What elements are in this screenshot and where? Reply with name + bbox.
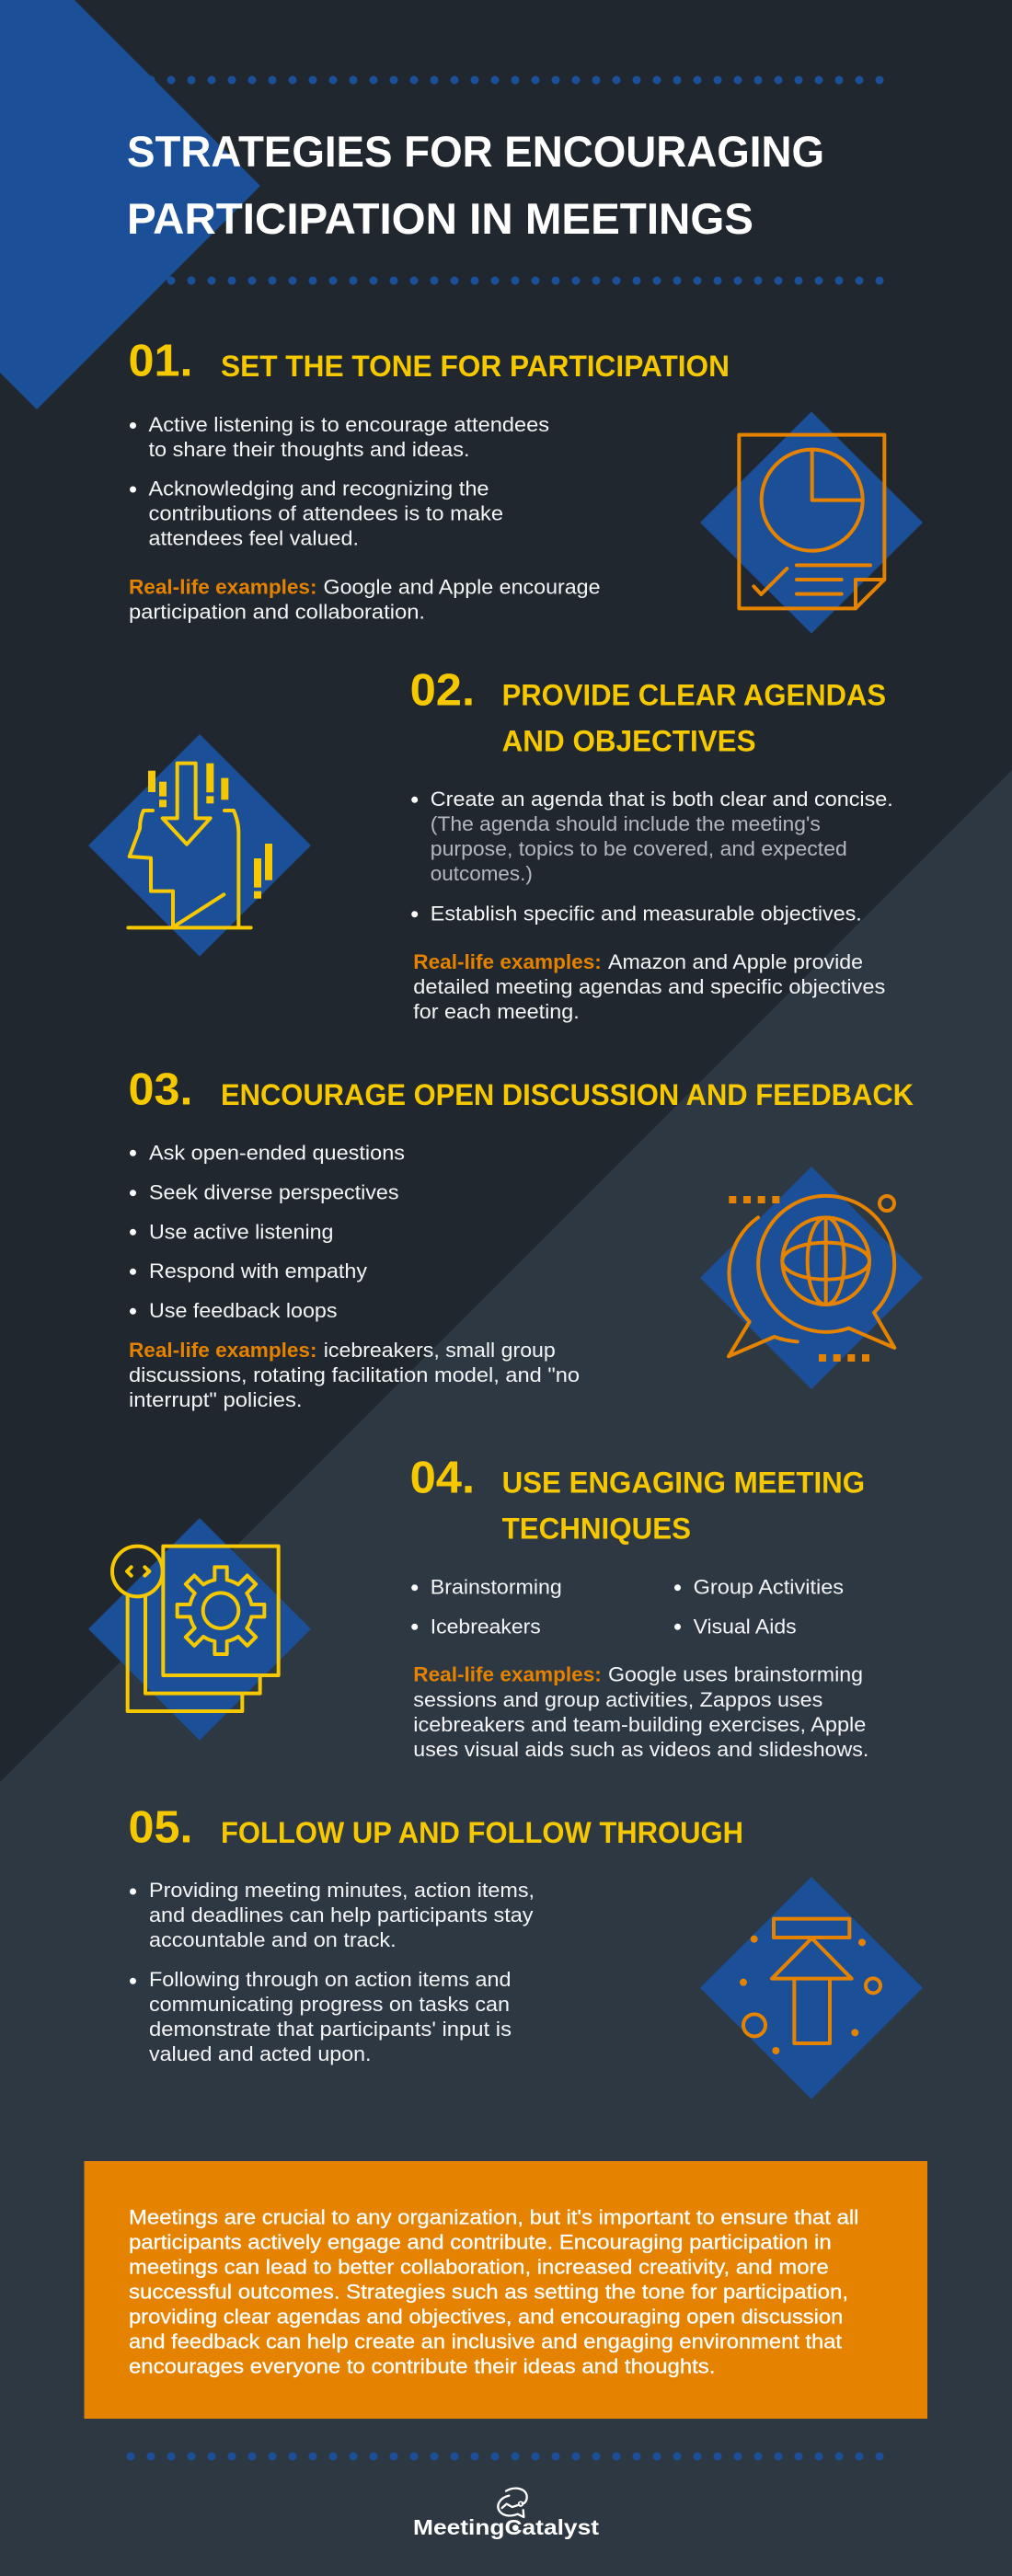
section 03 heading [129,1065,914,1115]
section 05 bullets: communicating progress on tasks can [149,1993,510,2016]
section 02 heading: AND OBJECTIVES [502,725,756,758]
section 04 bullets [411,1575,844,1638]
section 05 bullets: accountable and on track. [149,1928,397,1951]
section 02 bullets: Establish specific and measurable objectives. [431,902,862,925]
section 04 [88,1454,868,1761]
section 01 bullets: contributions of attendees is to make [149,502,503,524]
section 02 real-life examples: for each meeting. [413,1000,580,1023]
section 02 [88,666,893,1023]
section 05 bullets: valued and acted upon. [149,2042,372,2065]
section 02 heading: 02. [410,666,475,716]
section 05 bullets [130,1879,535,2065]
section 02 heading [410,666,886,758]
logo: MeetingCatalyst: MeetingCatalyst [413,2515,599,2539]
section 03 [129,1065,923,1411]
section 03 real-life examples: discussions, rotating facilitation model, and "no [129,1363,580,1386]
section 05 bullets: Following through on action items and [149,1968,512,1991]
summary panel: successful outcomes. Strategies such as setting the tone for participation, [129,2280,848,2303]
section 05 heading: FOLLOW UP AND FOLLOW THROUGH [221,1816,743,1849]
section 04 real-life examples [413,1663,868,1761]
section 03 bullets: Ask open-ended questions [149,1141,405,1164]
section 01 heading [129,337,730,386]
section 01 bullets: Acknowledging and recognizing the [149,477,489,500]
section 01 real-life examples: Real-life examples: [129,576,316,598]
section 05 heading: 05. [129,1803,193,1853]
title: STRATEGIES FOR ENCOURAGING [127,127,824,176]
section 05 bullets: Providing meeting minutes, action items, [149,1879,535,1902]
section 02 heading: PROVIDE CLEAR AGENDAS [502,679,886,712]
section 05 [129,1803,923,2099]
section 04 bullets: Brainstorming [431,1575,562,1598]
section 03 real-life examples: Real-life examples: [129,1339,316,1362]
section 01 real-life examples: Google and Apple encourage [324,576,600,598]
section 01 [129,337,923,634]
summary panel: encourages everyone to contribute their ideas and thoughts. [129,2354,715,2377]
section 03 bullets: Use active listening [149,1220,333,1243]
section 04 heading: 04. [410,1454,475,1503]
section 02 real-life examples: detailed meeting agendas and specific objectives [413,975,885,998]
summary panel: participants actively engage and contribute. Encouraging participation in [129,2230,832,2253]
section 02 bullets: Create an agenda that is both clear and concise. [431,788,893,811]
section 04 real-life examples: sessions and group activities, Zappos uses [413,1688,822,1711]
section 02 bullets: outcomes.) [431,862,533,885]
section 05 heading [129,1803,743,1853]
section 01 bullets [130,413,549,550]
section 03 bullets: Seek diverse perspectives [149,1180,399,1203]
section 03 bullets [130,1141,405,1322]
title [127,127,824,243]
section 05 bullets: and deadlines can help participants stay [149,1903,534,1926]
blue corner diamond [0,0,260,409]
title: PARTICIPATION IN MEETINGS [127,194,753,243]
section 01 bullets: attendees feel valued. [149,526,359,550]
section 04 heading [410,1454,865,1546]
section 02 bullets [411,788,893,925]
icon: up arrow with bar [700,1877,923,2099]
section 02 bullets: (The agenda should include the meeting's [431,812,821,835]
section 01 real-life examples [129,576,600,624]
icon: stacked pages with gear [88,1518,311,1741]
section 04 heading: TECHNIQUES [502,1512,691,1546]
section 02 real-life examples: Amazon and Apple provide [608,950,863,973]
section 02 real-life examples [413,950,885,1023]
summary panel: providing clear agendas and objectives, and encouraging open discussion [129,2305,843,2328]
section 04 real-life examples: Real-life examples: [413,1663,602,1686]
summary panel: meetings can lead to better collaboration, increased creativity, and more [129,2255,829,2278]
section 01 real-life examples: participation and collaboration. [129,600,425,624]
summary panel: and feedback can help create an inclusive and engaging environment that [129,2329,843,2352]
section 01 heading: SET THE TONE FOR PARTICIPATION [221,350,730,383]
section 03 real-life examples [129,1339,580,1411]
logo: MeetingCatalyst [413,2489,599,2539]
section 03 real-life examples: icebreakers, small group [324,1339,556,1362]
icon: head with down arrow [88,734,311,957]
section 02 real-life examples: Real-life examples: [413,950,602,973]
section 03 real-life examples: interrupt" policies. [129,1388,302,1411]
section 04 heading: USE ENGAGING MEETING [502,1466,865,1500]
summary panel [85,2161,927,2419]
summary panel: Meetings are crucial to any organization, but it's important to ensure that all [129,2205,859,2228]
section 04 real-life examples: icebreakers and team-building exercises, Apple [413,1713,866,1736]
icon: speech bubbles with globe [700,1167,923,1389]
section 03 heading: ENCOURAGE OPEN DISCUSSION AND FEEDBACK [221,1078,914,1111]
section 04 real-life examples: uses visual aids such as videos and slideshows. [413,1738,868,1761]
section 03 heading: 03. [129,1065,193,1115]
icon: document with pie chart and checklist [700,411,923,634]
section 05 bullets: demonstrate that participants' input is [149,2018,512,2041]
section 04 real-life examples: Google uses brainstorming [608,1663,863,1686]
section 01 heading: 01. [129,337,193,386]
section 02 bullets: purpose, topics to be covered, and expected [431,837,847,860]
section 01 bullets: Active listening is to encourage attendees [149,413,549,436]
section 04 bullets: Icebreakers [431,1615,541,1638]
section 03 bullets: Use feedback loops [149,1299,337,1322]
section 04 bullets: Group Activities [694,1575,844,1598]
section 03 bullets: Respond with empathy [149,1259,368,1282]
section 01 bullets: to share their thoughts and ideas. [149,438,469,461]
section 04 bullets: Visual Aids [694,1615,797,1638]
